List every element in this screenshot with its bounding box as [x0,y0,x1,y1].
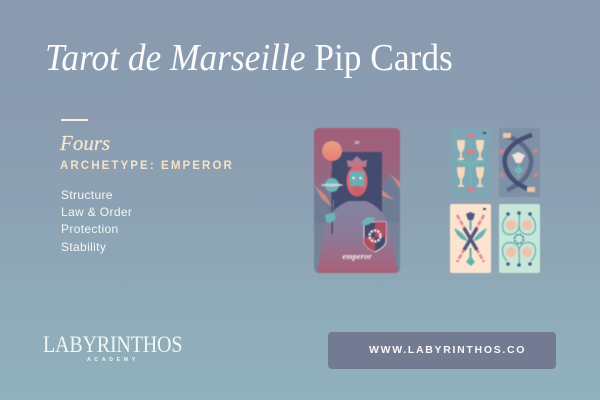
pip card: four of swords [499,128,540,197]
back panel [332,152,382,212]
keyword list: Structure [61,188,113,202]
accent rule [61,119,88,121]
head [346,156,368,196]
sun [322,141,342,161]
card numeral: III [355,140,360,145]
logo: Labyrinthos Academy [43,332,182,363]
body [317,201,398,273]
keyword list: Protection [61,222,119,236]
logo subline: ACADEMY [87,357,139,363]
keyword list: Law & Order [61,205,132,219]
url text: WWW.LABYRINTHOS.CO [369,344,526,356]
sceptre [331,172,333,234]
pip card: four of pentacles [498,204,540,274]
heading: archetype: ARCHETYPE: EMPEROR [60,160,234,172]
pip card: four of cups [450,128,491,197]
emperor card [314,128,400,274]
pip card: four of wands [449,203,492,274]
shield [364,222,386,252]
mountains [314,185,334,223]
title: Tarot de Marseille Pip Cards [45,37,453,79]
card name: emperor [342,251,372,261]
keyword list: Stability [61,240,106,254]
url button [328,332,556,369]
logo wordmark: LABYRINTHOS [43,332,182,357]
heading: suit number: Fours [60,131,110,155]
keyword list [61,188,132,254]
